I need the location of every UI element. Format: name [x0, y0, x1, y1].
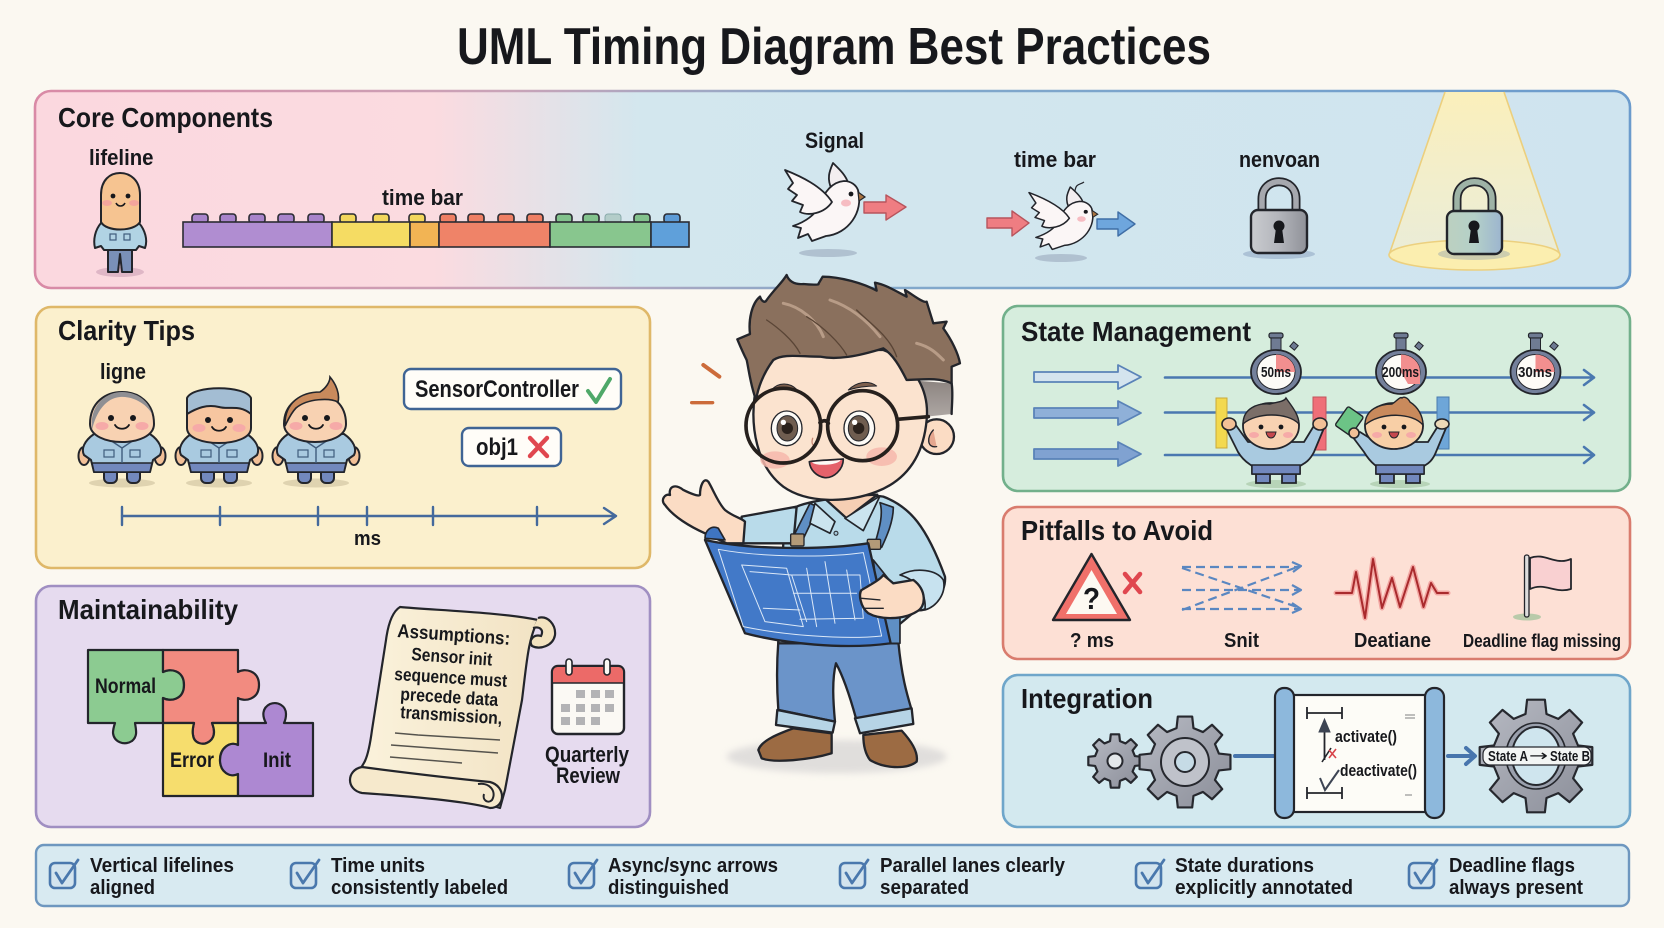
- checklist item: arrows: [569, 855, 778, 899]
- icon: lifeline character two: [176, 388, 262, 488]
- checklist item: parallel lanes: [840, 855, 1066, 899]
- checklist item: state durations: explicitly annotated: [1175, 877, 1353, 899]
- icon: lifeline character one: [78, 392, 166, 488]
- diagram: sequence scroll: deactivate(): [1340, 761, 1417, 780]
- checklist item: lifelines: [50, 855, 234, 899]
- label: normal: Normal: [95, 675, 156, 698]
- callout: good name: SensorController: [415, 376, 579, 403]
- label: init: Init: [263, 749, 291, 772]
- heading: state management: State Management: [1021, 316, 1251, 347]
- checklist item: deadline flags: always present: [1449, 877, 1583, 899]
- icon: calendar: [552, 659, 624, 734]
- checklist item: parallel lanes: Parallel lanes clearly: [880, 855, 1066, 877]
- diagram: sequence scroll: activate(): [1335, 727, 1397, 746]
- label: error: Error: [170, 749, 214, 772]
- checklist item: arrows: distinguished: [608, 877, 729, 899]
- icon: three state arrows: [1034, 365, 1141, 466]
- icon: warning triangle: [1053, 554, 1140, 620]
- callout: good name: [404, 369, 621, 409]
- icon: spotlight on padlock: [1389, 92, 1560, 270]
- label: quarterly review: [545, 742, 630, 788]
- icon: dove with in and out arrows: [987, 182, 1135, 262]
- checklist item: state durations: State durations: [1175, 855, 1314, 877]
- icon: stopwatch 200ms: 200ms: [1382, 364, 1419, 381]
- label: deadline flag missing: Deadline flag missing: [1463, 631, 1621, 651]
- checklist item: lifelines: Vertical lifelines: [90, 855, 234, 877]
- panel: checklist strip: [36, 845, 1629, 906]
- icon: lifeline character three: [272, 377, 360, 488]
- chart: ms axis: [122, 507, 616, 525]
- heading: pitfalls to avoid: Pitfalls to Avoid: [1021, 515, 1213, 546]
- scroll: assumptions: [350, 607, 555, 808]
- arrow to state gear: [1448, 748, 1475, 764]
- label: signal: Signal: [805, 128, 864, 153]
- panel: pitfalls to avoid: [1003, 507, 1630, 659]
- icon: state transition gear: State B: [1550, 748, 1590, 765]
- label: garbled lock caption: nenvoan: [1239, 147, 1320, 172]
- icon: figure holding yellow and red bars: [1216, 397, 1327, 488]
- diagram: sequence scroll: [1275, 688, 1444, 818]
- scroll: assumptions: Sensor init: [411, 644, 493, 670]
- checklist item: time units: Time units: [331, 855, 425, 877]
- scroll: assumptions: sequence must: [394, 664, 508, 691]
- icon: state transition gear: →: [1529, 746, 1548, 765]
- checklist item: parallel lanes: separated: [880, 877, 969, 899]
- connector line: [1235, 754, 1274, 758]
- checklist item: deadline flags: [1409, 855, 1583, 899]
- checklist item: lifelines: aligned: [90, 877, 155, 899]
- label: snit: Snit: [1224, 630, 1259, 652]
- icon: state transition gear: [1480, 700, 1592, 812]
- icon: stopwatch 200ms: [1376, 333, 1426, 394]
- scroll: assumptions: precede data: [400, 684, 500, 710]
- checklist item: deadline flags: Deadline flags: [1449, 855, 1575, 877]
- label: ms: ms: [354, 528, 381, 550]
- label: time bar 2: time bar: [1014, 147, 1096, 172]
- icon: lifeline figure: [94, 173, 146, 277]
- central mascot: engineer holding blueprint: [663, 275, 960, 773]
- label: quarterly review: Review: [556, 763, 621, 788]
- icon: pink flag: [1513, 555, 1571, 620]
- chart: parallel lanes: [1165, 370, 1594, 463]
- panel: maintainability: [36, 586, 650, 827]
- panel: clarity tips: [36, 307, 650, 568]
- label: garbled deadline: Deatiane: [1354, 630, 1431, 652]
- icon: large gear: [1140, 717, 1230, 807]
- checklist item: time units: consistently labeled: [331, 877, 508, 899]
- checklist item: state durations: [1136, 855, 1353, 899]
- diagram: state puzzle: [88, 650, 313, 796]
- label: quarterly review: Quarterly: [545, 742, 630, 767]
- checklist item: time units: [291, 855, 508, 899]
- chart: time bar blocks: [183, 214, 689, 247]
- scroll: assumptions: transmission,: [400, 702, 503, 728]
- icon: stopwatch 30ms: [1510, 333, 1560, 394]
- icon: state transition gear: State A: [1488, 748, 1528, 765]
- heading: integration: Integration: [1021, 683, 1153, 714]
- callout: bad name: [462, 428, 561, 466]
- scroll: assumptions: Assumptions:: [397, 621, 511, 650]
- icon: warning triangle: ?: [1083, 581, 1100, 616]
- icon: crossed dashed arrows: [1182, 562, 1301, 613]
- label: lifeline: lifeline: [89, 145, 154, 170]
- icon: padlock: [1243, 182, 1315, 259]
- icon: stopwatch 30ms: 30ms: [1518, 364, 1552, 381]
- label: unknown ms: ? ms: [1070, 630, 1114, 652]
- title: UML Timing Diagram Best Practices: [457, 18, 1211, 76]
- icon: jitter waveform: [1336, 559, 1448, 618]
- checklist item: arrows: Async/sync arrows: [608, 855, 778, 877]
- icon: stopwatch 50ms: [1251, 333, 1301, 394]
- panel: core components: [35, 91, 1630, 288]
- heading: core components: Core Components: [58, 102, 273, 133]
- heading: maintainability: Maintainability: [58, 594, 238, 625]
- heading: clarity tips: Clarity Tips: [58, 315, 195, 346]
- panel: state management: [1003, 306, 1630, 491]
- label: ligne: ligne: [100, 359, 146, 384]
- icon: dove with arrow: [785, 163, 906, 257]
- callout: bad name: obj1: [476, 434, 518, 461]
- icon: stopwatch 50ms: 50ms: [1261, 364, 1291, 381]
- icon: figure holding green and blue bars: [1335, 397, 1449, 488]
- label: time bar: time bar: [382, 185, 463, 210]
- panel: integration: [1003, 675, 1630, 827]
- icon: small gear: [1088, 734, 1142, 788]
